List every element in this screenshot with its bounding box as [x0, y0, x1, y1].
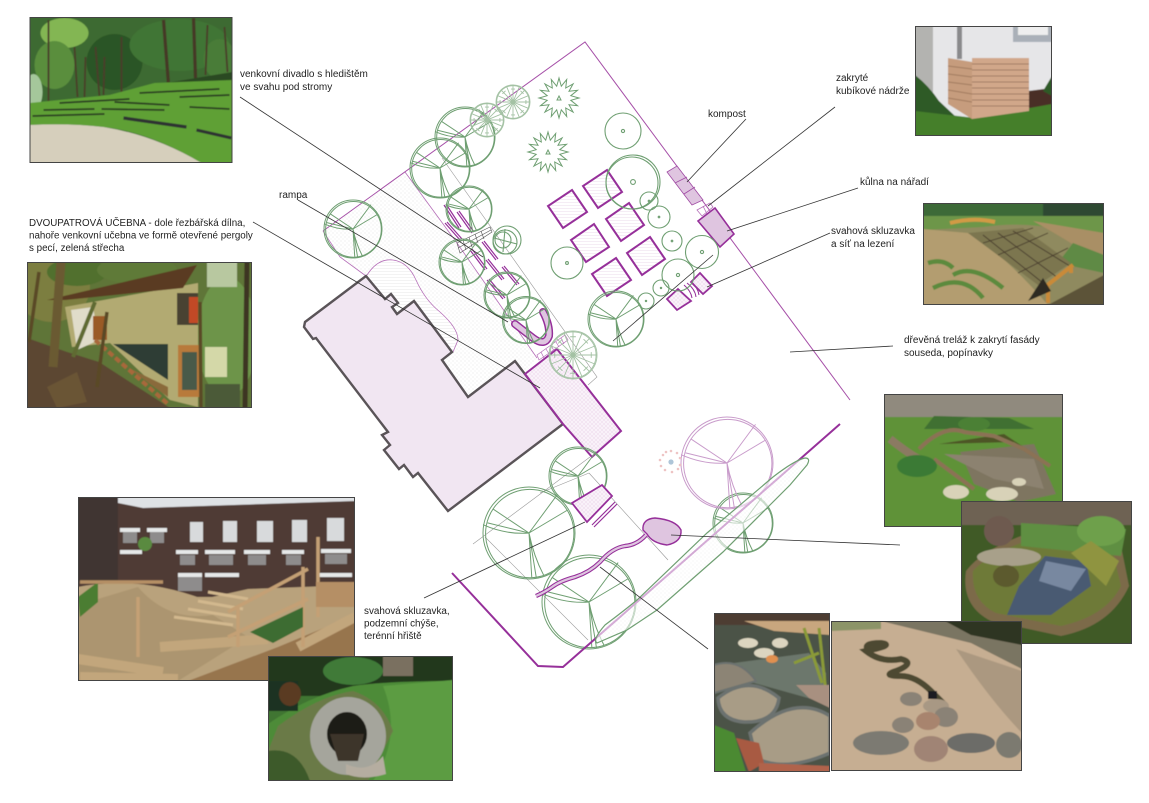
site plan [304, 42, 850, 667]
label: tool shed: kůlna na nářadí [860, 176, 929, 188]
label: outdoor theatre: venkovní divadlo s hledištěm [240, 69, 368, 80]
inner path boundary [323, 172, 537, 358]
amphitheatre seating [444, 204, 519, 299]
building [304, 276, 563, 511]
ramp [515, 312, 549, 342]
photo: natural playground [78, 497, 355, 681]
hatched lawn area [366, 260, 458, 352]
conifers [528, 78, 579, 172]
well with dotted ring [659, 450, 681, 473]
label: outdoor theatre: ve svahu pod stromy [240, 82, 332, 93]
dotted path area [323, 172, 537, 397]
footbridge grid [537, 335, 568, 360]
tool shed [698, 208, 734, 247]
label: slope slide and net: a síť na lezení [831, 239, 894, 250]
label: ramp: rampa [279, 190, 308, 201]
photo: wild pond with logs [884, 394, 1063, 527]
green swale [596, 458, 809, 643]
label: slide, hut, playground: podzemní chýše, [364, 618, 439, 630]
photo: amphitheatre under trees [24, 17, 236, 163]
photo: two-storey classroom [14, 252, 257, 408]
label: covered tanks: zakryté [836, 73, 868, 84]
label: two-storey classroom: nahoře venkovní učebna ve formě otevřené pergoly [29, 230, 253, 242]
photo: pond with wicker edge [961, 501, 1132, 644]
label: wooden trellis: dřevěná treláž k zakrytí fasády [904, 335, 1040, 346]
photo: serpentine sand stream [831, 621, 1022, 771]
terrace [525, 349, 621, 457]
winding stream [536, 535, 646, 596]
photo: lily-shaped water bowls [714, 613, 830, 772]
label: compost: kompost [708, 109, 746, 120]
vegetable beds [548, 170, 665, 296]
lower boundary [452, 424, 840, 667]
label: slide, hut, playground: terénní hřiště [364, 631, 422, 642]
pond outline [643, 518, 681, 545]
small hut [572, 485, 617, 527]
photo: covered cube tank [915, 26, 1052, 136]
label: wooden trellis: souseda, popínavky [904, 348, 993, 359]
photo: slope with climbing net [923, 203, 1104, 305]
photo: underground hut [268, 656, 453, 781]
trees [324, 85, 773, 649]
play elements [667, 273, 712, 310]
small tanks [697, 203, 713, 216]
label: covered tanks: kubíkové nádrže [836, 86, 910, 97]
fruit trees [493, 113, 718, 309]
compost [667, 166, 703, 205]
survey lines [442, 158, 668, 640]
label: two-storey classroom: s pecí, zelená střecha [29, 243, 125, 254]
leader lines [240, 97, 900, 649]
label: two-storey classroom: DVOUPATROVÁ UČEBNA - dole řezbářská dílna, [29, 218, 245, 229]
label: slide, hut, playground: svahová skluzavka, [364, 606, 450, 617]
plot boundary [323, 42, 850, 400]
label: slope slide and net: svahová skluzavka [831, 226, 915, 237]
stair grid [457, 227, 492, 253]
